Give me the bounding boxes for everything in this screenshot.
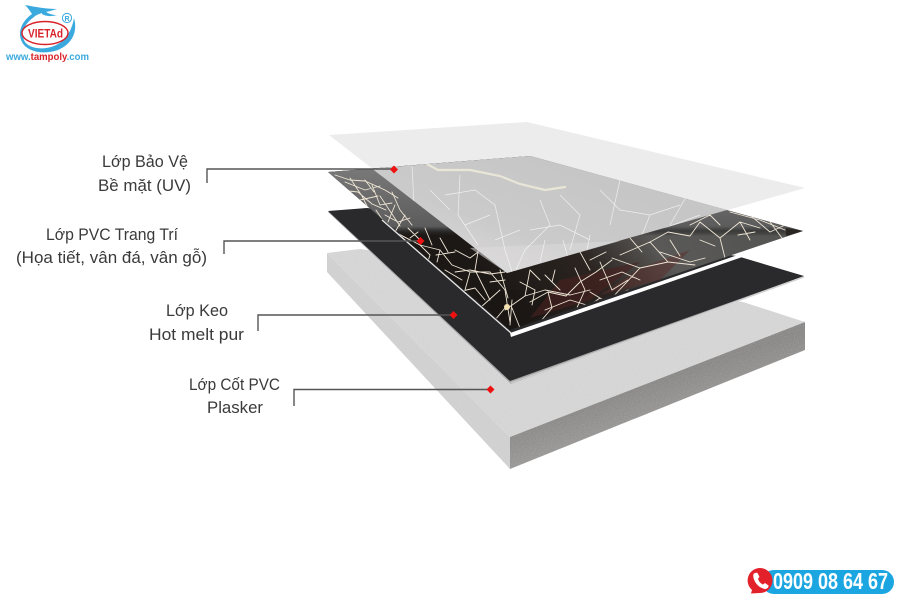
label: decorative PVC layer: Lớp PVC Trang Trí [46,225,178,244]
icon: red ellipse [22,22,68,44]
leader line: PVC core layer [294,386,494,406]
label: UV protection layer [98,152,191,195]
faded veins under film [412,163,700,272]
film over marble overlap [372,156,727,273]
label: decorative PVC layer: (Họa tiết, vân đá, vân gỗ) [16,248,207,267]
label: PVC core layer [189,375,280,417]
core top face [327,249,805,437]
leader line: adhesive layer [258,311,458,331]
core left side face [327,253,510,469]
leader line: decorative PVC layer [224,237,424,254]
label: adhesive layer: Hot melt pur [149,325,244,344]
label: PVC core layer: Plasker [207,398,263,417]
leader line: UV layer [207,166,398,183]
layer: decorative marble PVC [328,156,805,337]
label: PVC core layer: Lớp Cốt PVC [189,375,280,394]
core right side face [510,322,805,469]
registered mark: R [64,16,70,23]
layer: black adhesive film [328,208,804,384]
label: decorative PVC layer [16,225,207,267]
layer: PVC core board [327,249,805,469]
label: adhesive layer [149,301,244,344]
icon: red phone bubble [748,568,772,594]
phone badge [748,568,894,594]
layer: top UV film [329,122,805,273]
label: adhesive layer: Lớp Keo [166,301,228,320]
label: UV protection layer: Lớp Bảo Vệ [102,152,188,171]
logo: VIETAd [5,5,89,63]
label: UV protection layer: Bề mặt (UV) [98,176,191,195]
logo wordmark: VIETAd [28,26,63,40]
marble veins [335,175,803,328]
phone pill background [762,570,894,594]
icon: blue swoosh bird [20,5,75,52]
website url: www.tampoly.com [5,51,89,63]
